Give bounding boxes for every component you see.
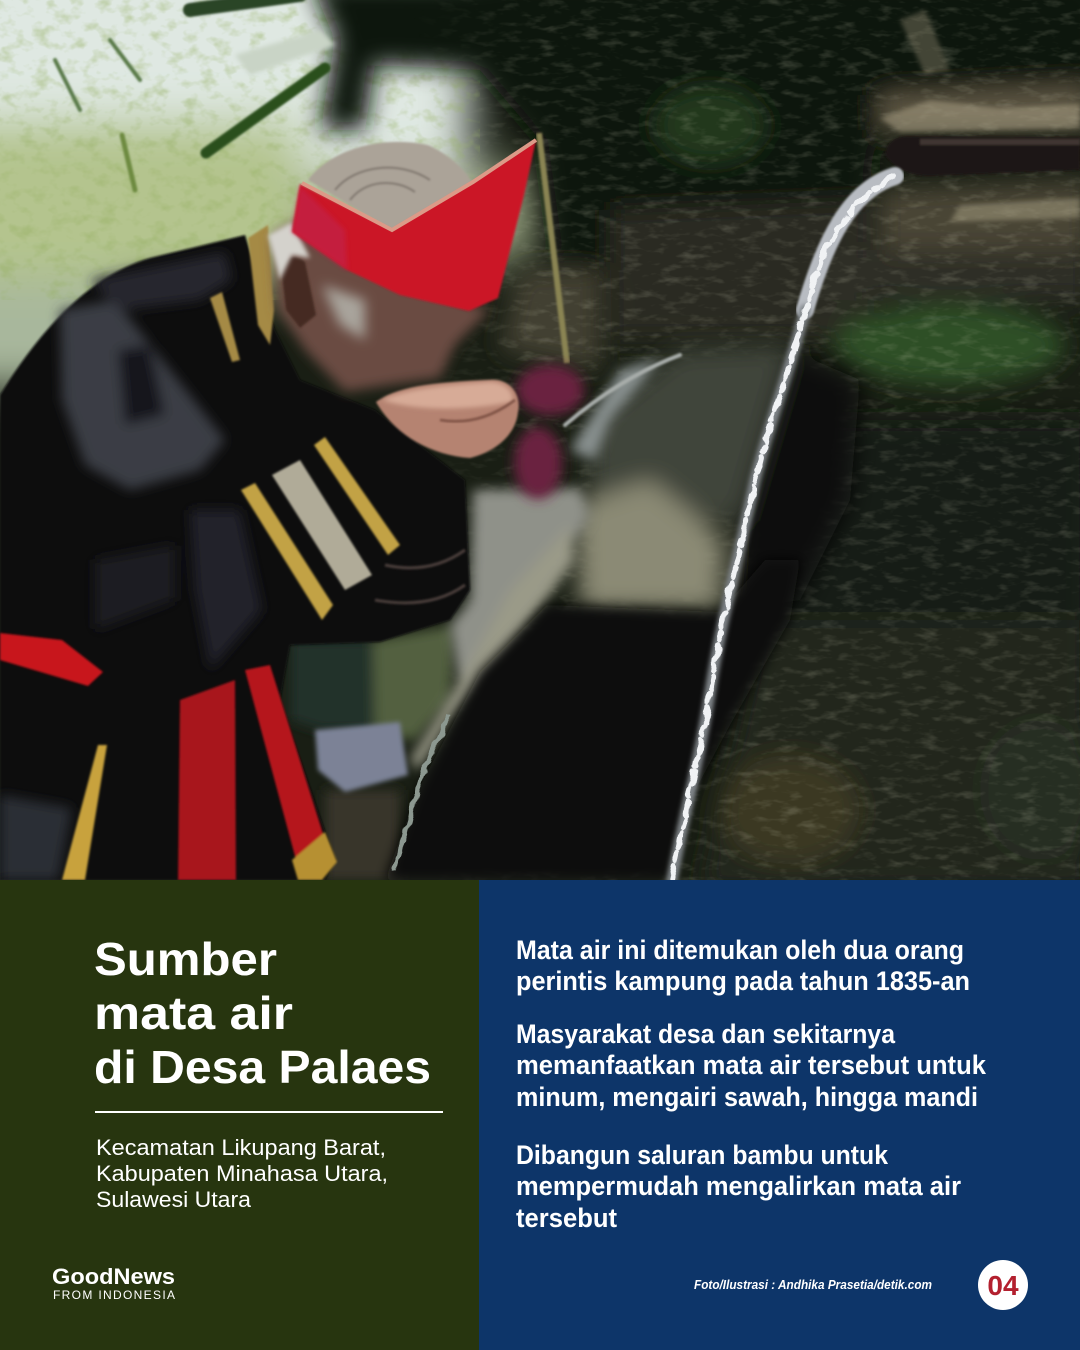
bamboo pipe [885,136,1080,176]
sleeve cuff bands [241,437,465,620]
panel: blue facts panel [479,880,1080,1350]
page number badge: 04 [987,1270,1019,1301]
fact: bamboo channel: tersebut [516,1203,617,1233]
location text: Kabupaten Minahasa Utara, [96,1161,388,1186]
panel: green title panel [0,880,479,1350]
dark tree canopy [310,0,1080,890]
fact: bamboo channel [516,1140,961,1233]
location text: Sulawesi Utara [96,1187,251,1212]
location text: Kecamatan Likupang Barat, [96,1135,386,1160]
robe folds [0,252,262,880]
gold collar and trim [62,225,274,880]
cupped hands [376,380,519,458]
logo: GoodNews from Indonesia: GoodNews [52,1264,175,1289]
grey hair [308,142,472,230]
leaves and branch [55,0,325,190]
photo credit: Foto/Ilustrasi : Andhika Prasetia/detik.com [694,1278,932,1292]
elder figure [0,140,536,880]
logo: GoodNews from Indonesia: FROM INDONESIA [53,1288,175,1302]
black robe [0,235,470,880]
flowers [514,365,584,499]
fact: discovery [516,935,970,996]
fact: uses: Masyarakat desa dan sekitarnya [516,1019,896,1049]
title: mata air [94,987,293,1039]
fact: uses: memanfaatkan mata air tersebut untuk [516,1050,987,1080]
location text [96,1135,388,1212]
title [94,933,431,1093]
rocks [290,345,860,880]
title: Sumber [94,933,277,985]
fact: discovery: perintis kampung pada tahun 1835-an [516,966,970,996]
fact: uses [516,1019,987,1112]
fact: discovery: Mata air ini ditemukan oleh dua orang [516,935,964,965]
fact: bamboo channel: mempermudah mengalirkan mata air [516,1171,961,1201]
page number badge [978,1260,1028,1310]
head and face [272,220,490,392]
title: di Desa Palaes [94,1041,431,1093]
fact: uses: minum, mengairi sawah, hingga mandi [516,1082,978,1112]
red sash [0,633,337,880]
fact: bamboo channel: Dibangun saluran bambu untuk [516,1140,889,1170]
photo: elder drinking from a spring [0,0,1080,890]
red headband [292,140,536,311]
photo background: forest and moss [0,0,1080,890]
logo: GoodNews from Indonesia [52,1264,175,1302]
water stream [565,176,895,880]
